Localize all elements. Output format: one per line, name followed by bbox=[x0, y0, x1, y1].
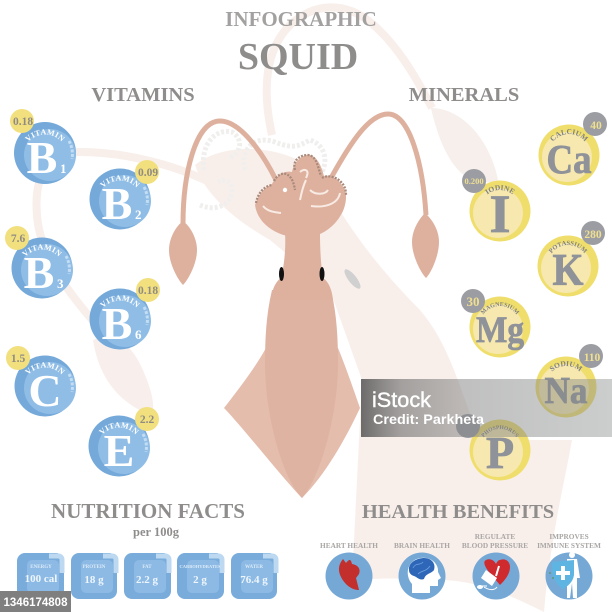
value badge potassium: 280 bbox=[584, 229, 602, 241]
heading: health benefits: HEALTH BENEFITS bbox=[362, 501, 554, 523]
vitamin B1 bbox=[14, 122, 76, 184]
benefit: improves immune system: IMPROVES bbox=[549, 532, 589, 541]
mineral magnesium: MAGNESIUM bbox=[480, 302, 520, 314]
watermark banner: iStock bbox=[372, 388, 431, 412]
nutrition card: carbohydrates: 2 g bbox=[193, 574, 207, 586]
value badge E: 2.2 bbox=[140, 414, 154, 426]
value badge sodium bbox=[579, 344, 603, 368]
icon: shield bbox=[549, 560, 574, 589]
mineral phosphorus: P bbox=[486, 427, 514, 478]
heading: minerals: MINERALS bbox=[409, 84, 519, 106]
tentacle clubs bbox=[169, 213, 439, 285]
vitamin B3 bbox=[12, 238, 73, 298]
mineral iodine: IODINE bbox=[484, 185, 515, 194]
mineral iodine bbox=[470, 180, 530, 244]
nutrition card: protein: 18 g bbox=[84, 574, 104, 586]
mantle bbox=[265, 290, 338, 498]
mineral phosphorus bbox=[470, 420, 530, 480]
mineral magnesium: Mg bbox=[476, 310, 524, 351]
value badge B6 bbox=[136, 278, 160, 302]
icon: head with brain bbox=[408, 558, 441, 593]
arm suckers bbox=[256, 155, 346, 203]
value badge C bbox=[6, 346, 30, 370]
mineral potassium: POTASSIUM bbox=[548, 240, 588, 254]
mineral sodium bbox=[536, 356, 596, 418]
icon: body bbox=[567, 552, 580, 598]
vitamin C: C bbox=[28, 365, 62, 416]
nutrition card: carbohydrates bbox=[177, 553, 224, 599]
benefit: brain health: BRAIN HEALTH bbox=[394, 541, 450, 550]
nutrition card: carbohydrates: CARBOHYDRATES bbox=[180, 564, 221, 569]
vitamin B2: B bbox=[102, 178, 132, 229]
vitamin B1: B bbox=[27, 132, 57, 183]
illustration: squid bbox=[169, 114, 439, 498]
value badge iodine: 0.200 bbox=[464, 176, 484, 186]
vitamin C bbox=[14, 356, 76, 416]
nutrition card: water: WATER bbox=[245, 565, 263, 570]
vitamin B1: VITAMIN bbox=[24, 129, 65, 142]
nutrition card: energy bbox=[17, 553, 64, 599]
value badge B3 bbox=[5, 226, 29, 250]
vitamin B3: B bbox=[24, 247, 54, 298]
image id tag bbox=[0, 591, 71, 612]
value badge B2: 0.09 bbox=[138, 167, 158, 179]
nutrition card: fat bbox=[124, 553, 171, 599]
heading: nutrition facts: per 100g bbox=[133, 525, 180, 539]
value badge B1 bbox=[10, 109, 34, 133]
vitamin C: VITAMIN bbox=[24, 362, 65, 374]
vitamin B2: VITAMIN bbox=[100, 175, 140, 188]
neck and collar bbox=[271, 232, 333, 300]
benefit: improves immune system bbox=[537, 532, 601, 600]
mineral sodium: Na bbox=[544, 370, 588, 412]
vitamin B6: 6 bbox=[135, 327, 142, 342]
benefit: regulate blood pressure: BLOOD PRESSURE bbox=[462, 541, 528, 550]
value badge B6: 0.18 bbox=[138, 285, 158, 297]
benefit: regulate blood pressure: REGULATE bbox=[475, 532, 515, 541]
icon: heart and cuff bbox=[477, 559, 510, 590]
nutrition card: energy: 100 cal bbox=[25, 573, 57, 585]
vitamin B1: 1 bbox=[60, 161, 66, 176]
vitamin B2 bbox=[90, 168, 151, 230]
heading: nutrition facts bbox=[51, 499, 245, 539]
heading: vitamins: VITAMINS bbox=[91, 84, 195, 106]
benefit: regulate blood pressure bbox=[462, 532, 528, 600]
vitamin E: VITAMIN bbox=[98, 422, 139, 434]
mineral calcium: Ca bbox=[546, 136, 592, 182]
nutrition card: protein bbox=[71, 553, 117, 599]
mineral calcium: CALCIUM bbox=[550, 129, 588, 142]
tentacles bbox=[183, 114, 426, 224]
mineral potassium bbox=[538, 236, 598, 296]
title: INFOGRAPHIC bbox=[225, 7, 377, 31]
nutrition card: protein: PROTEIN bbox=[83, 565, 106, 570]
eyes bbox=[279, 267, 324, 281]
watermark banner bbox=[361, 379, 612, 437]
mineral iodine: I bbox=[489, 184, 511, 244]
mineral sodium: SODIUM bbox=[550, 361, 583, 372]
mineral potassium: K bbox=[552, 245, 584, 295]
value badge calcium bbox=[583, 112, 607, 136]
benefit: heart health bbox=[320, 541, 378, 600]
value badge magnesium: 30 bbox=[466, 294, 480, 309]
vitamin E bbox=[88, 416, 150, 476]
watermark banner: Credit: Parkheta bbox=[373, 411, 484, 427]
mineral calcium bbox=[538, 124, 600, 186]
benefit: improves immune system: IMMUNE SYSTEM bbox=[537, 541, 601, 550]
value badge magnesium bbox=[461, 289, 485, 313]
arm highlights bbox=[263, 170, 340, 213]
nutrition card: fat: FAT bbox=[142, 565, 152, 570]
value badge B2 bbox=[135, 160, 159, 184]
vitamin E: E bbox=[104, 425, 134, 476]
benefit: brain health bbox=[394, 541, 450, 600]
nutrition card: water bbox=[231, 553, 277, 599]
value badge sodium: 110 bbox=[584, 352, 601, 364]
fins bbox=[224, 348, 360, 498]
nutrition card: energy: ENERGY bbox=[30, 565, 52, 570]
vitamin B6: VITAMIN bbox=[100, 295, 140, 308]
title bbox=[225, 7, 377, 78]
head bbox=[255, 155, 346, 238]
value badge B1: 0.18 bbox=[13, 116, 33, 128]
vitamin B6: B bbox=[102, 298, 132, 349]
value badge E bbox=[135, 407, 159, 431]
value badge iodine bbox=[462, 169, 486, 193]
mineral magnesium bbox=[470, 296, 530, 358]
value badge B3: 7.6 bbox=[11, 233, 25, 245]
title: SQUID bbox=[238, 36, 358, 78]
nutrition card: water: 76.4 g bbox=[240, 574, 268, 586]
heading: nutrition facts: NUTRITION FACTS bbox=[51, 499, 245, 523]
image id tag: 1346174808 bbox=[4, 597, 68, 609]
value badge phosphorus bbox=[456, 414, 480, 438]
vitamin B3: VITAMIN bbox=[22, 244, 62, 256]
value badge potassium bbox=[581, 221, 605, 245]
vitamin B6 bbox=[90, 288, 151, 350]
benefit: heart health: HEART HEALTH bbox=[320, 541, 378, 550]
icon: heart bbox=[339, 559, 360, 590]
value badge C: 1.5 bbox=[11, 353, 25, 365]
vitamin B2: 2 bbox=[135, 207, 142, 222]
nutrition card: fat: 2.2 g bbox=[136, 574, 158, 586]
vitamin B3: 3 bbox=[57, 276, 64, 291]
value badge calcium: 40 bbox=[590, 120, 602, 132]
mineral phosphorus: PHOSPHORUS bbox=[481, 425, 519, 438]
